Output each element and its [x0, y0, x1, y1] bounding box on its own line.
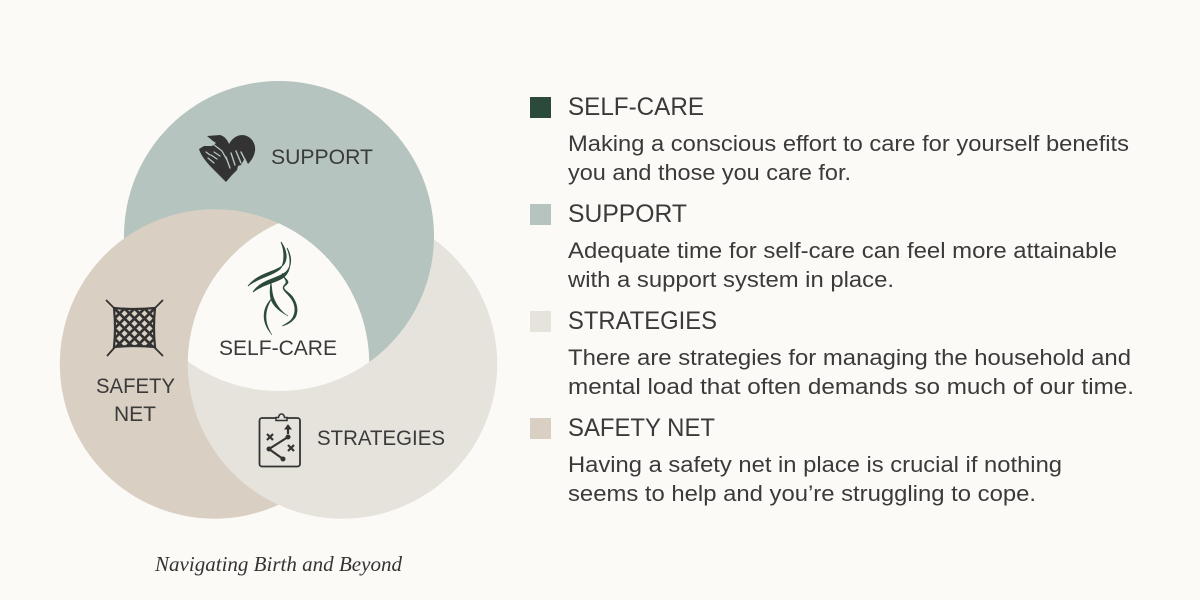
legend item: safety net: seems to help and you’re struggling to cope. — [568, 481, 1036, 506]
venn diagram — [60, 81, 497, 519]
icon: safety net — [105, 299, 164, 357]
legend item: self-care: Making a conscious effort to care for yourself benefits — [568, 131, 1129, 156]
legend item: safety net: SAFETY NET — [568, 414, 715, 442]
legend item: support: Adequate time for self-care can feel more attainable — [568, 238, 1117, 263]
legend item: self-care — [530, 93, 1129, 185]
circle: support — [124, 81, 434, 391]
circle: safety net — [60, 209, 369, 519]
legend item: strategies: mental load that often demands so much of our time. — [568, 374, 1134, 399]
legend item: safety net: Having a safety net in place is crucial if nothing — [568, 452, 1062, 477]
legend item: support: SUPPORT — [568, 200, 687, 228]
legend item: strategies: There are strategies for managing the household and — [568, 345, 1131, 370]
legend — [530, 93, 1134, 506]
label: self-care: SELF-CARE — [219, 336, 337, 360]
icon: pregnant figure — [248, 242, 297, 335]
legend item: strategies: STRATEGIES — [568, 307, 717, 335]
icon: heart with hands — [199, 135, 255, 182]
overlap: strategies over safety net — [188, 243, 369, 504]
legend item: self-care: you and those you care for. — [568, 160, 851, 185]
icon: clipboard plan — [260, 414, 300, 466]
legend item: support: with a support system in place. — [567, 267, 894, 292]
legend item: safety net — [530, 414, 1062, 506]
label: strategies: STRATEGIES — [317, 426, 445, 450]
caption: Navigating Birth and Beyond — [154, 552, 402, 576]
label: support: SUPPORT — [271, 145, 373, 169]
label: safety net: NET — [114, 402, 156, 426]
circle: strategies — [188, 209, 497, 519]
legend item: self-care: SELF-CARE — [568, 93, 704, 121]
legend item: support — [530, 200, 1117, 292]
legend item: strategies — [530, 307, 1134, 399]
overlap: self-care centre — [188, 223, 370, 391]
label: safety net: SAFETY — [96, 374, 175, 398]
label: safety net — [96, 374, 175, 426]
